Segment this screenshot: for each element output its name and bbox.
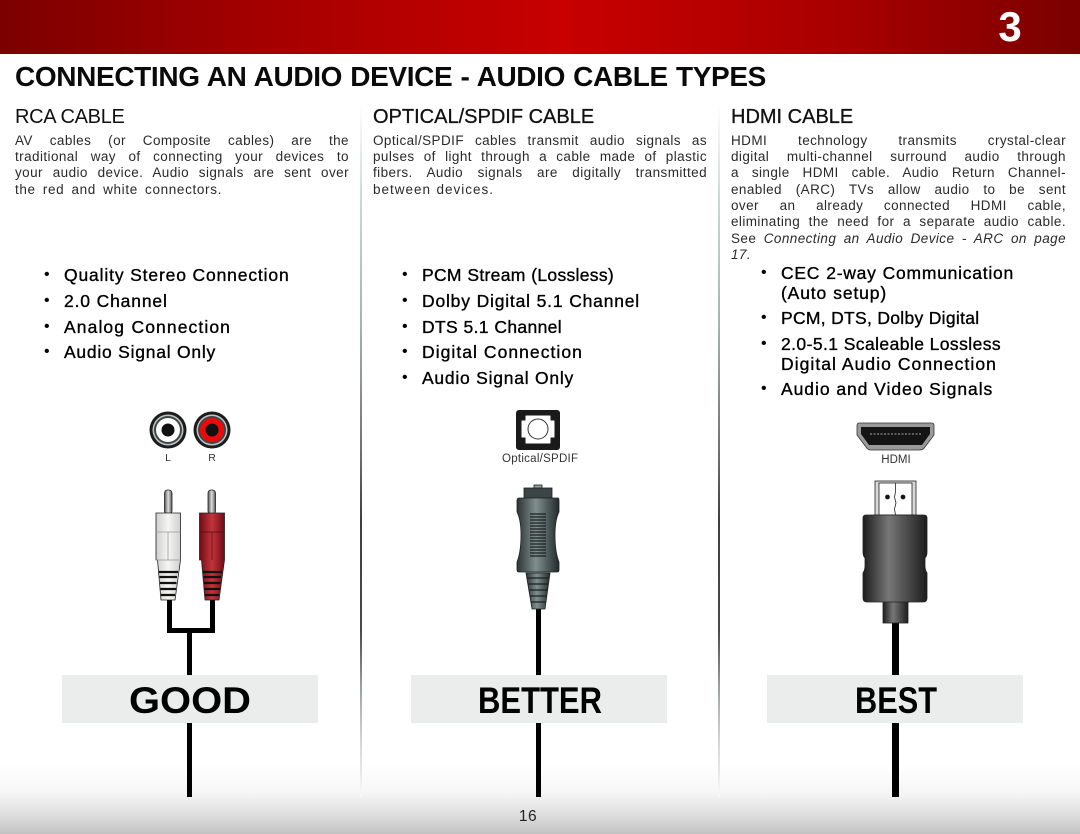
text block: RCA description: AV cables (or Composite cables) are the xyxy=(15,133,349,148)
bottom grey gradient band xyxy=(0,765,1080,834)
icon: HDMI plug xyxy=(863,481,927,623)
rating box: best: BEST xyxy=(855,680,937,721)
text block: HDMI description: over an already connected HDMI cable, xyxy=(731,198,1066,213)
feature list: HDMI: 2.0-5.1 Scaleable Lossless xyxy=(781,334,1001,354)
text block: HDMI description: 17. xyxy=(731,247,751,262)
title: CONNECTING AN AUDIO DEVICE - AUDIO CABLE TYPES xyxy=(15,61,766,92)
heading: HDMI cable: HDMI CABLE xyxy=(731,106,853,128)
feature list: optical: Audio Signal Only xyxy=(422,368,574,388)
text block: RCA description xyxy=(15,133,349,197)
text block: HDMI description: a single HDMI cable. Audio Return Channel- xyxy=(731,165,1066,180)
cable: HDMI xyxy=(892,620,899,797)
icon: R jack: R xyxy=(208,452,216,464)
feature list: HDMI: • xyxy=(761,309,767,326)
feature list: HDMI: • xyxy=(761,335,767,352)
feature list: optical: Digital Connection xyxy=(422,342,583,362)
text block: HDMI description: digital multi-channel surround audio through xyxy=(731,149,1066,164)
feature list: RCA: Analog Connection xyxy=(64,317,231,337)
feature list: RCA: 2.0 Channel xyxy=(64,291,168,311)
text block: HDMI description: See Connecting an Audio Device - ARC on page xyxy=(731,231,1066,246)
feature list: RCA: • xyxy=(44,266,50,283)
icon: optical port: Optical/SPDIF xyxy=(502,453,578,465)
feature list: optical: Dolby Digital 5.1 Channel xyxy=(422,291,640,311)
feature list: HDMI: Audio and Video Signals xyxy=(781,379,993,399)
heading: optical/SPDIF cable: OPTICAL/SPDIF CABLE xyxy=(373,106,594,128)
text block: RCA description: your audio device. Audio signals are sent over xyxy=(15,165,349,180)
text block: optical description: pulses of light through a cable made of plastic xyxy=(373,149,707,164)
feature list: optical xyxy=(402,265,640,388)
feature list: HDMI: • xyxy=(761,264,767,281)
feature list: RCA: • xyxy=(44,292,50,309)
feature list: HDMI xyxy=(761,263,1014,399)
feature list: RCA: Audio Signal Only xyxy=(64,342,216,362)
feature list: HDMI: CEC 2-way Communication xyxy=(781,263,1014,283)
text block: HDMI description: enabled (ARC) TVs allow audio to be sent xyxy=(731,182,1066,197)
header band xyxy=(0,0,1080,54)
feature list: HDMI: PCM, DTS, Dolby Digital xyxy=(781,308,979,328)
text block: HDMI description: HDMI technology transmits crystal-clear xyxy=(731,133,1066,148)
feature list: optical: • xyxy=(402,318,408,335)
icon: optical plug xyxy=(517,485,559,609)
feature list: optical: • xyxy=(402,343,408,360)
feature list: optical: DTS 5.1 Channel xyxy=(422,317,562,337)
text block: optical description: fibers. Audio signals are digitally transmitted xyxy=(373,165,707,180)
feature list: optical: • xyxy=(402,292,408,309)
feature list: RCA: • xyxy=(44,343,50,360)
text block: optical description: between devices. xyxy=(373,182,494,197)
text block: optical description xyxy=(373,133,707,197)
panel: optical/SPDIF cable xyxy=(373,106,707,797)
cable: optical xyxy=(536,605,541,797)
feature list: optical: • xyxy=(402,266,408,283)
illustration: HDMI connector and cable xyxy=(767,422,1023,797)
rating box: better xyxy=(411,675,667,723)
feature list: HDMI: (Auto setup) xyxy=(781,283,887,303)
feature list: HDMI: Digital Audio Connection xyxy=(781,354,997,374)
feature list: RCA xyxy=(44,265,290,362)
feature list: HDMI: • xyxy=(761,380,767,397)
text block: RCA description: traditional way of connecting your devices to xyxy=(15,149,349,164)
text block: RCA description: the red and white connectors. xyxy=(15,182,222,197)
feature list: optical: • xyxy=(402,369,408,386)
icon: red RCA plug xyxy=(200,490,224,600)
rating box: good: GOOD xyxy=(129,680,251,721)
text block: optical description: Optical/SPDIF cables transmit audio signals as xyxy=(373,133,707,148)
text block: HDMI description: eliminating the need for a separate audio cable. xyxy=(731,214,1066,229)
icon: optical port xyxy=(502,410,578,465)
icon: HDMI port xyxy=(857,423,934,466)
illustration: RCA connectors and cable xyxy=(62,412,318,797)
feature list: optical: PCM Stream (Lossless) xyxy=(422,265,614,285)
icon: L jack xyxy=(150,412,186,464)
rating box: better: BETTER xyxy=(478,680,602,721)
icon: HDMI port: HDMI xyxy=(881,454,911,466)
page number: 16 xyxy=(519,808,537,825)
panel: RCA cable xyxy=(15,106,349,797)
rating box: good xyxy=(62,675,318,723)
rating box: best xyxy=(767,675,1023,723)
illustration: optical connector and cable xyxy=(411,410,667,797)
text block: HDMI description xyxy=(731,133,1066,262)
heading: RCA cable: RCA CABLE xyxy=(15,106,125,128)
cable: RCA split xyxy=(170,600,212,797)
panel: HDMI cable xyxy=(731,106,1066,797)
icon: L jack: L xyxy=(165,452,171,464)
icon: R jack xyxy=(194,412,230,464)
feature list: RCA: • xyxy=(44,318,50,335)
chapter number: 3 xyxy=(998,3,1022,50)
icon: white RCA plug xyxy=(156,490,180,600)
feature list: RCA: Quality Stereo Connection xyxy=(64,265,290,285)
